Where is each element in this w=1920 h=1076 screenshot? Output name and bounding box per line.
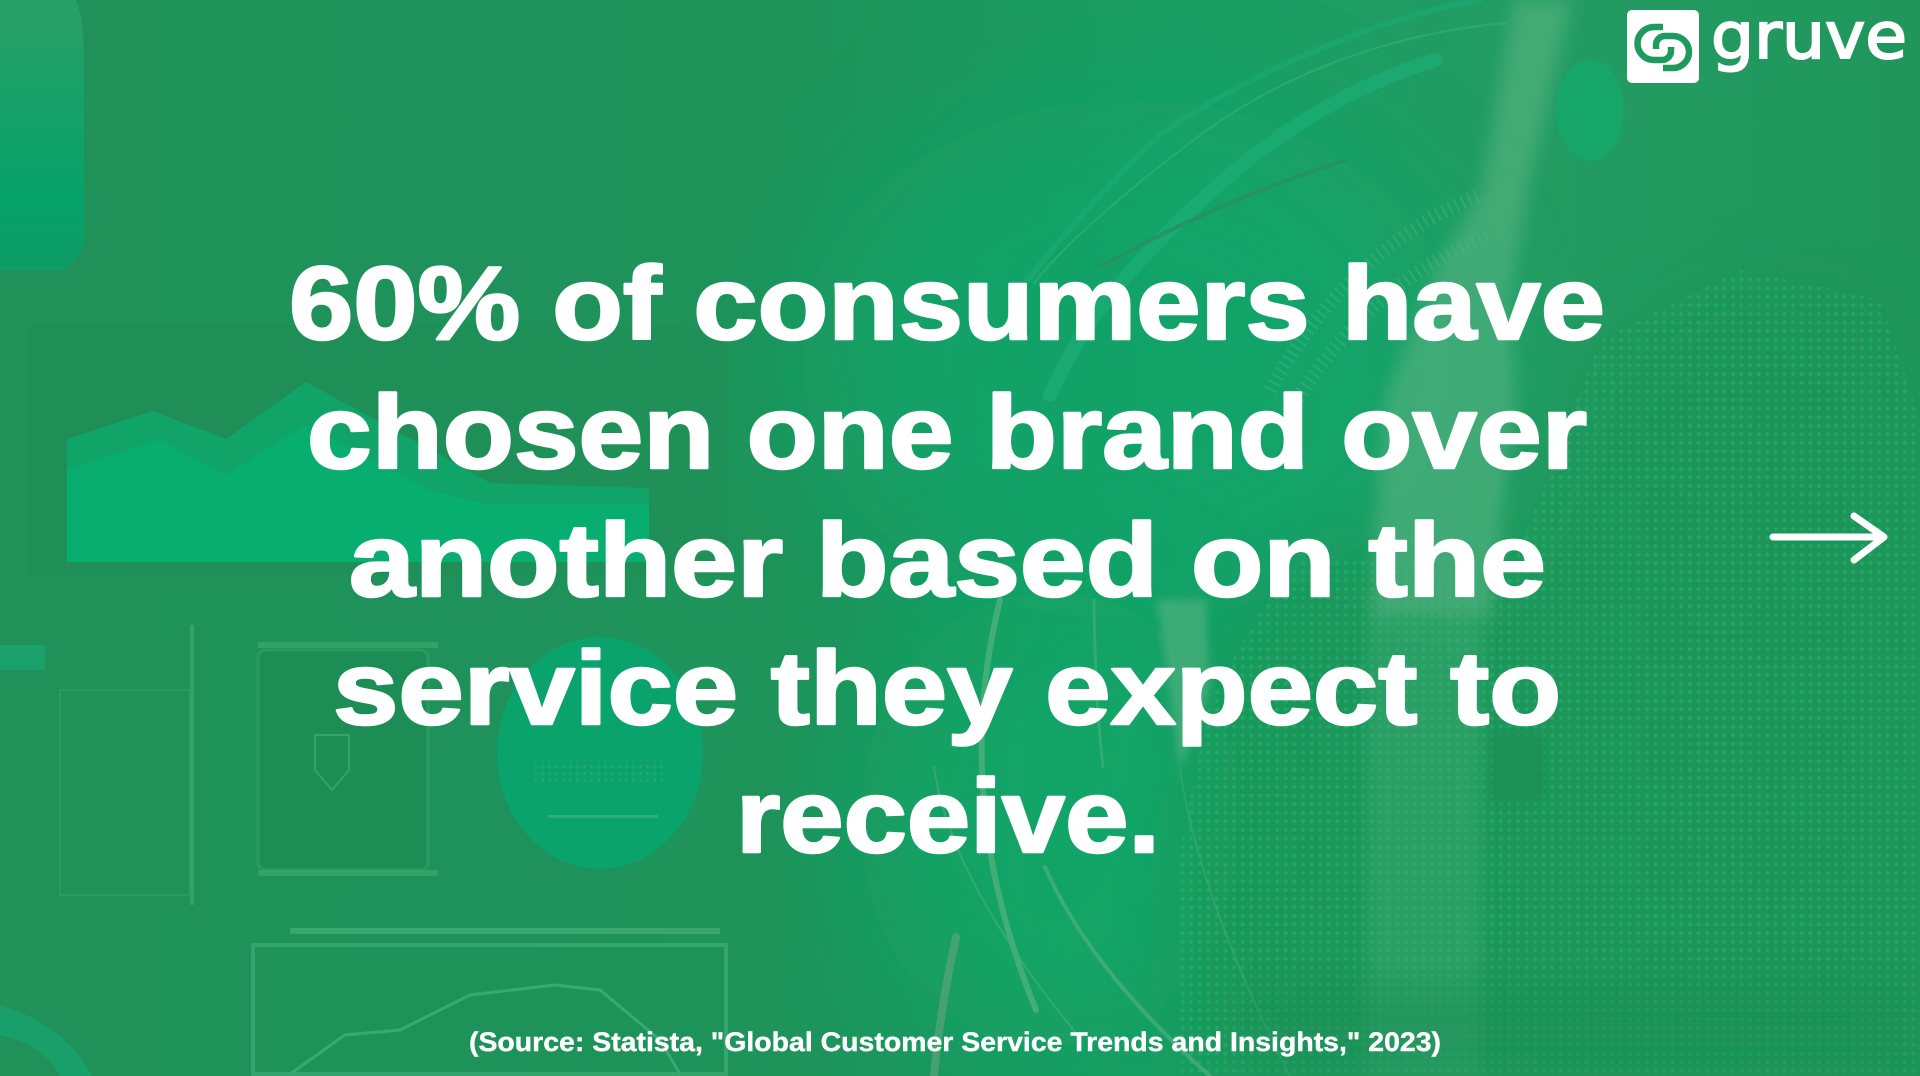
bottom-left arc	[0, 1005, 92, 1076]
headline line 5: receive.	[736, 759, 1160, 875]
arrow pointing right	[1773, 516, 1884, 560]
dot matrix on the right	[1180, 270, 1920, 1076]
logo wordmark: gruve	[1711, 0, 1907, 74]
dark bottom-right vignette	[1250, 990, 1920, 1076]
top-left rounded panel	[0, 0, 84, 270]
headline line 2: chosen one brand over	[307, 375, 1587, 491]
bottom monitor	[253, 928, 726, 1074]
light vertical translucent strip	[1157, 0, 1572, 1076]
headline statistic	[289, 246, 1605, 875]
saturated glow lower centre	[860, 590, 1240, 1050]
logo icon	[1627, 10, 1699, 83]
headline line 3: another based on the	[349, 503, 1546, 619]
concentric arcs	[934, 0, 1507, 1076]
headline line 4: service they expect to	[333, 631, 1561, 747]
source citation: (Source: Statista, "Global Customer Service Trends and Insights," 2023)	[469, 1027, 1441, 1057]
green ellipse	[497, 637, 703, 869]
logo: gruve	[1627, 0, 1907, 83]
lower-left server panels	[0, 625, 438, 910]
top-right eye detail	[1556, 60, 1624, 160]
dark streaks	[900, 20, 1346, 1076]
headline line 1: 60% of consumers have	[289, 246, 1605, 362]
teal glow behind the headline	[800, 100, 1460, 620]
area chart	[67, 382, 649, 562]
dark left dashboard panel	[28, 325, 728, 575]
dark square shadow	[1490, 733, 1545, 801]
ripple lines upper right	[1270, 195, 1490, 410]
